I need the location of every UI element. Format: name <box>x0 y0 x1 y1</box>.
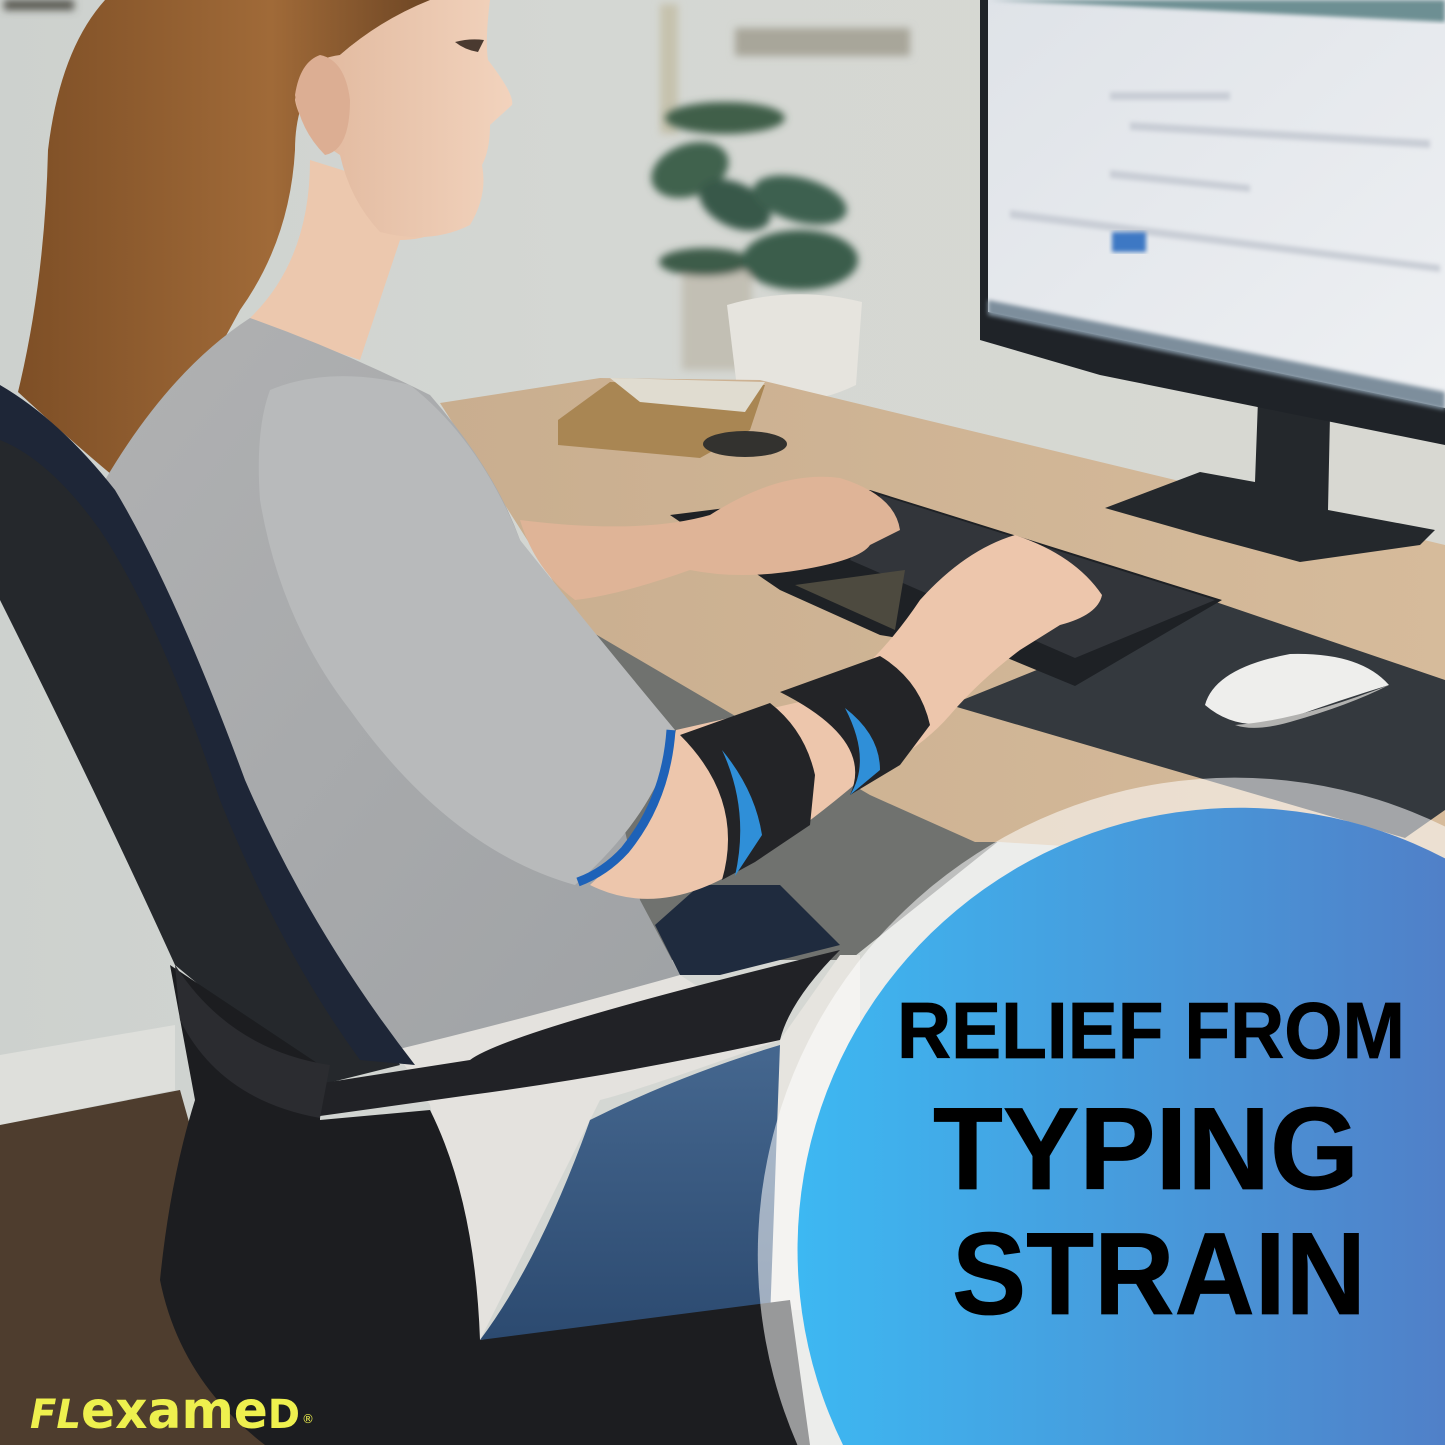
translucent outer circle <box>758 778 1445 1445</box>
baseboard <box>0 1025 175 1125</box>
arm band: upper <box>680 703 815 880</box>
desk surface <box>440 378 1445 870</box>
shirt torso <box>105 318 680 1062</box>
mouse <box>1205 654 1389 728</box>
jeans <box>480 1045 780 1340</box>
right hem block <box>770 955 860 1310</box>
jeans shadow under arm <box>655 885 840 975</box>
shirt sleeve <box>259 376 675 885</box>
chair back mesh <box>0 400 400 1085</box>
ear <box>295 55 350 155</box>
monitor stand <box>1105 400 1435 562</box>
headline line 3: STRAIN <box>952 1208 1366 1339</box>
plant in pot <box>644 102 862 401</box>
wooden floor <box>0 1090 280 1445</box>
screen content <box>1010 92 1440 272</box>
mouse pad <box>950 600 1445 838</box>
chair strap <box>175 965 330 1118</box>
headline line 2: TYPING <box>933 1083 1359 1214</box>
blue sleeve trim <box>578 730 671 882</box>
logo: flexamed: FLexameD <box>30 1381 300 1441</box>
monitor screen <box>988 0 1445 408</box>
neck <box>250 160 470 360</box>
shadow under desk <box>575 620 1000 960</box>
near arm and hand <box>590 535 1102 899</box>
arm band: lower <box>780 656 930 795</box>
chair lower back and seat <box>160 965 810 1445</box>
far forearm and hand <box>520 477 900 600</box>
white shirt hem <box>395 975 780 1340</box>
eye <box>455 39 484 52</box>
chair back frame <box>0 385 415 1065</box>
headline: relief from typing strain <box>897 986 1405 1339</box>
chair armrest <box>307 950 840 1116</box>
hair <box>18 0 440 475</box>
keyboard <box>670 490 1222 686</box>
white pot <box>727 294 862 401</box>
shelf and wall detail <box>4 0 910 134</box>
logo: flexamed: ® <box>302 1412 314 1426</box>
face <box>295 0 512 237</box>
books on desk <box>558 378 787 458</box>
headline line 1: RELIEF FROM <box>897 986 1405 1075</box>
computer monitor <box>980 0 1445 562</box>
blue gradient circle <box>798 808 1445 1445</box>
